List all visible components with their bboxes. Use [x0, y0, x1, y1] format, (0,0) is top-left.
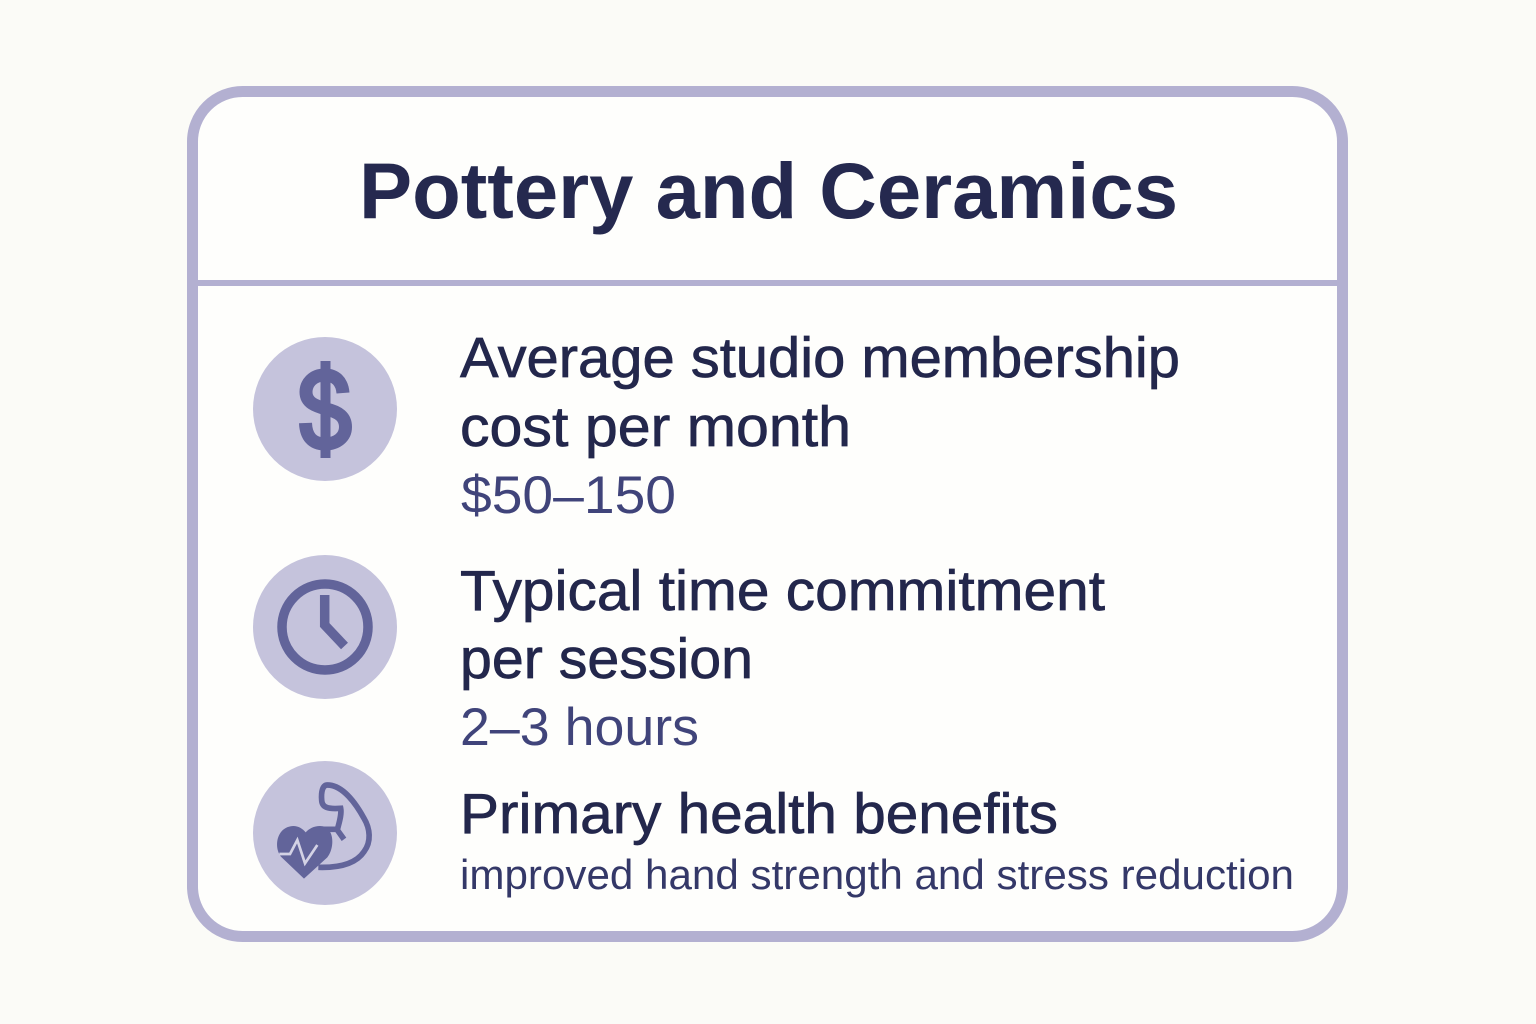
- text: membership value: $50–150: [461, 466, 676, 525]
- text: time value: 2–3 hours: [460, 698, 699, 757]
- text: health value: improved hand strength and stress reduction: [460, 851, 1294, 898]
- title: Pottery and Ceramics: [359, 146, 1178, 235]
- text: membership label: Average studio membership: [460, 326, 1180, 390]
- icon: dollar sign: [253, 337, 397, 481]
- text: time label second line: per session: [460, 627, 753, 691]
- text: time label: Typical time commitment: [460, 559, 1105, 623]
- icon: clock: [253, 555, 397, 699]
- panel: card: [192, 92, 1342, 936]
- row: studio membership cost: [253, 326, 1180, 525]
- text: health label: Primary health benefits: [460, 782, 1058, 846]
- icon: flexed arm and heart: [253, 761, 397, 905]
- text: membership label second line: cost per month: [460, 395, 851, 459]
- row: health benefits: [253, 761, 1294, 905]
- row: time commitment: [253, 555, 1105, 757]
